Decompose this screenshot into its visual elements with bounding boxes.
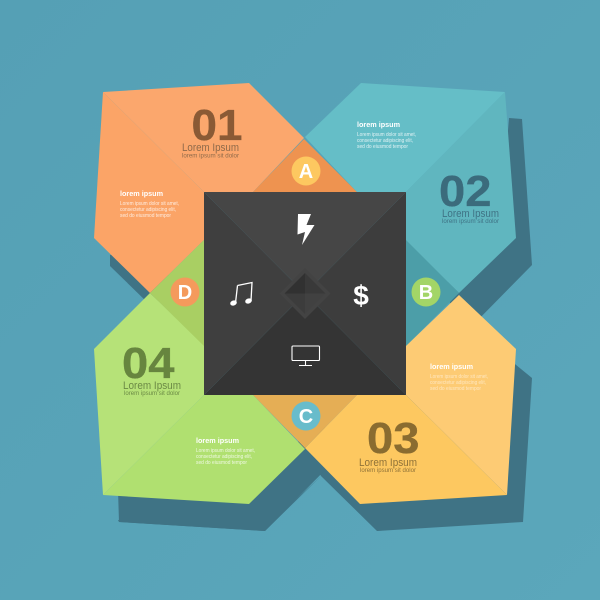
number 01: 01 [192, 101, 242, 150]
badge A [292, 156, 320, 186]
icon: lightning bolt [298, 214, 314, 245]
text block 01 [120, 189, 179, 219]
tab B [406, 240, 459, 346]
tab C [253, 395, 357, 448]
text block 03: consectetur adipiscing elit, [430, 380, 486, 386]
text block 01: lorem ipsum [120, 189, 163, 198]
icon: monitor [292, 346, 320, 366]
text block 04: consectetur adipiscing elit, [196, 454, 252, 460]
icon: music notes [229, 282, 253, 307]
text block 02: lorem ipsum [357, 120, 400, 129]
badge D [170, 278, 200, 306]
panel 01: orange [94, 83, 357, 293]
subcaption 03: lorem ipsum sit dolor [360, 467, 417, 474]
number 02: 02 [439, 167, 492, 216]
subcaption 01: lorem ipsum sit dolor [182, 152, 240, 160]
panel 02: teal [305, 83, 516, 346]
text block 04: Lorem ipsum dolor sit amet, [196, 448, 255, 454]
text block 04 [196, 436, 255, 466]
badge B [412, 278, 440, 306]
caption 01: Lorem Ipsum [182, 142, 239, 154]
text block 04: lorem ipsum [196, 436, 239, 445]
caption 03: Lorem Ipsum [359, 457, 417, 469]
text block 01: consectetur adipiscing elit, [120, 207, 176, 213]
badge B: B [419, 282, 433, 304]
text block 02 [357, 120, 416, 150]
badge D: D [178, 282, 192, 304]
badge C: C [299, 406, 313, 428]
center diamond [280, 268, 330, 319]
panel 04: green [94, 240, 305, 504]
subcaption 04: lorem ipsum sit dolor [124, 390, 181, 397]
text block 04: sed do eiusmod tempor [196, 460, 247, 466]
icon: dollar sign: $ [353, 280, 369, 311]
panel 03: yellow [253, 295, 516, 504]
text block 02: Lorem ipsum dolor sit amet, [357, 132, 416, 138]
text block 03: lorem ipsum [430, 362, 473, 371]
caption 02: Lorem Ipsum [442, 208, 499, 220]
tab D [150, 240, 204, 346]
caption 04: Lorem Ipsum [123, 380, 181, 392]
text block 01: Lorem ipsum dolor sit amet, [120, 201, 179, 207]
badge A: A [299, 161, 313, 183]
text block 03: sed do eiusmod tempor [430, 386, 481, 392]
tab A [253, 139, 357, 192]
text block 03: Lorem ipsum dolor sit amet, [430, 374, 488, 380]
number 03: 03 [367, 414, 420, 463]
text block 01: sed do eiusmod tempor [120, 213, 171, 219]
badge C [292, 402, 320, 430]
text block 02: consectetur adipiscing elit, [357, 138, 413, 144]
number 04: 04 [122, 339, 175, 388]
subcaption 02: lorem ipsum sit dolor [442, 218, 500, 225]
text block 02: sed do eiusmod tempor [357, 144, 408, 150]
center dark square [204, 192, 406, 395]
drop shadows [110, 118, 532, 531]
text block 03 [430, 362, 488, 392]
